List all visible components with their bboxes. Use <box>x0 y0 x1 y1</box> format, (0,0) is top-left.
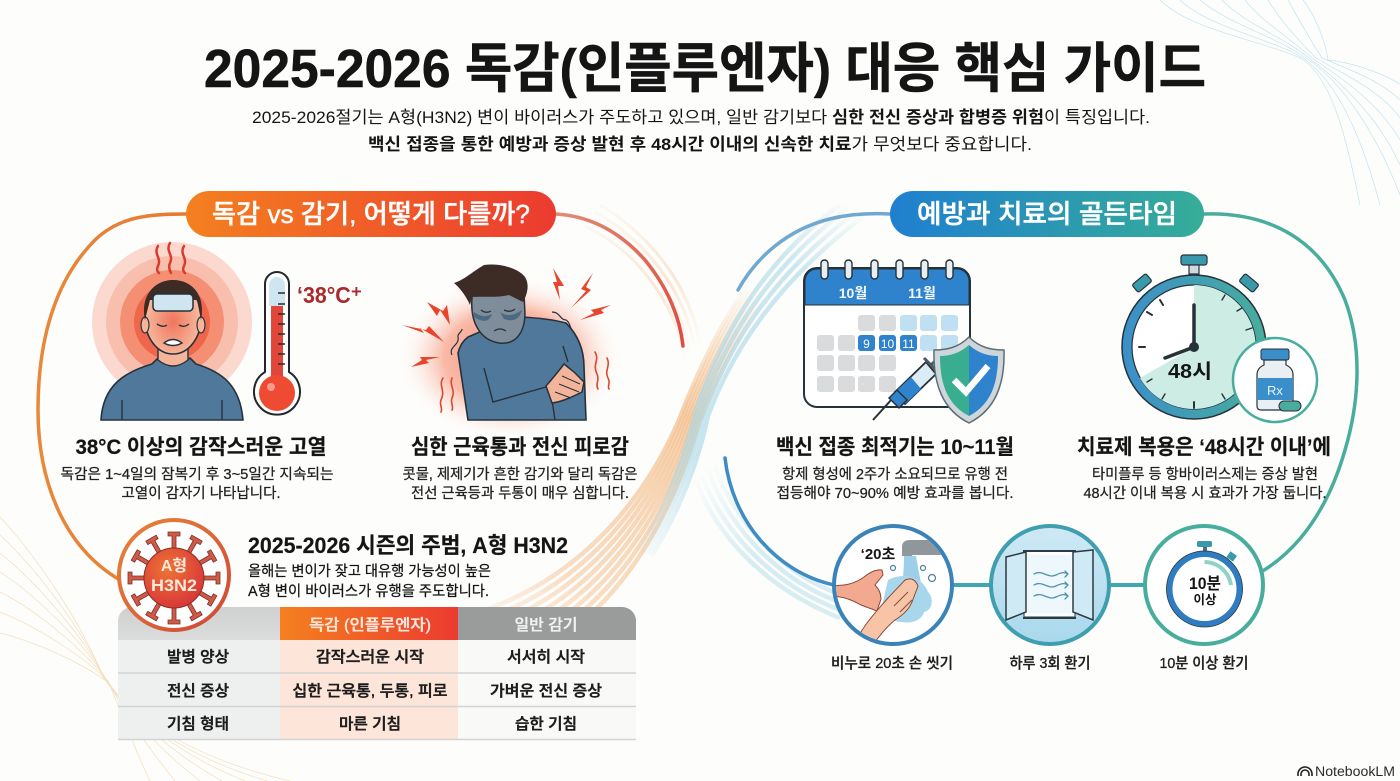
icon: stopwatch 48 hours: 48시 <box>1168 361 1212 383</box>
icon: calendar: 11 <box>902 337 915 351</box>
comparison table: 서서히 시작 <box>507 648 585 666</box>
comparison table: 마른 기침 <box>339 715 401 733</box>
block: severe muscle pain: 전선 근육등과 두통이 매우 심합니다. <box>411 485 629 502</box>
block: severe muscle pain <box>402 436 638 502</box>
comparison table: 십한 근육통, 두통, 피로 <box>292 682 448 700</box>
icon: stopwatch 48 hours <box>1122 255 1266 419</box>
icon: H3N2 virus badge: A형 <box>161 557 187 575</box>
panel: H3N2 text block: 2025-2026 시즌의 주범, A형 H3N2 <box>248 533 568 558</box>
subtitle text block: 백신 접종을 통한 예방과 증상 발현 후 48시간 이내의 신속한 치료 가 무엇보다 중요합니다. <box>368 135 1032 154</box>
label: hand washing: 비누로 20초 손 씻기 <box>831 655 953 672</box>
label: ventilate 3 times: 하루 3회 환기 <box>1010 655 1090 672</box>
icon: 10 minute timer: 이상 <box>1193 593 1217 607</box>
icon: H3N2 virus badge <box>119 520 229 630</box>
background wave lines: top right <box>1160 0 1400 205</box>
block: sudden high fever: 38°C 이상의 감작스러운 고열 <box>76 436 326 459</box>
block: treatment timing: 타미플루 등 항바이러스제는 증상 발현 <box>1092 466 1318 483</box>
panel: H3N2 text block: 올해는 변이가 잦고 대유행 가능성이 높은 <box>248 563 491 580</box>
comparison table <box>118 607 636 740</box>
icon: 10 minute timer <box>1145 526 1263 644</box>
background ribbon: central S-curve <box>470 205 864 664</box>
icon: 10 minute timer: 10분 <box>1189 574 1221 593</box>
icon: fever person <box>92 242 252 420</box>
block: treatment timing: 치료제 복용은 ‘48시간 이내’에 <box>1077 436 1331 459</box>
background wave lines: bottom left <box>0 517 290 781</box>
panel: H3N2 text block: A형 변이 바이러스가 유행을 주도합니다. <box>248 583 489 600</box>
icon: thermometer <box>254 272 300 415</box>
block: sudden high fever <box>60 436 334 502</box>
subtitle text block: 2025-2026절기는 A형(H3N2) 변이 바이러스가 주도하고 있으며, 일반 감기보다 심한 전신 증상과 합병증 위험 이 특징입니다. <box>252 108 1150 127</box>
icon: calendar: 10월 <box>839 285 867 301</box>
section header: golden time <box>890 191 1204 237</box>
icon: medicine bottle badge: Rx <box>1267 383 1283 398</box>
block: vaccine timing: 백신 접종 최적기는 10~11월 <box>776 436 1014 459</box>
label: ventilate 10 minutes: 10분 이상 환기 <box>1160 655 1248 672</box>
comparison table: 가벼운 전신 증상 <box>490 682 602 700</box>
block: treatment timing <box>1077 436 1331 502</box>
block: vaccine timing <box>776 436 1014 502</box>
section header: flu vs cold: 독감 vs 감기, 어떻게 다를까? <box>212 199 530 229</box>
comparison table: 습한 기침 <box>515 715 577 733</box>
icon: medicine bottle badge <box>1233 338 1317 422</box>
comparison table: 발병 양상 <box>167 648 229 666</box>
section header: golden time: 예방과 치료의 골든타임 <box>917 199 1177 229</box>
icon: person with muscle pain <box>400 265 620 438</box>
comparison table: 전신 증상 <box>167 682 229 700</box>
block: sudden high fever: 독감은 1~4일의 잠복기 후 3~5일간 지속되는 <box>60 466 334 483</box>
icon: H3N2 virus badge: H3N2 <box>151 577 197 595</box>
title: 2025-2026 독감(인플루엔자) 대응 핵심 가이드 <box>204 39 1206 99</box>
comparison table: 독감 (인플루엔자) <box>309 616 431 634</box>
block: severe muscle pain: 콧물, 제제기가 흔한 감기와 달리 독감은 <box>402 466 638 483</box>
watermark: NotebookLM: NotebookLM <box>1315 764 1395 779</box>
comparison table: 기침 형태 <box>167 715 229 733</box>
icon: calendar: 10 <box>881 337 894 351</box>
frame line: left panel <box>38 214 683 580</box>
icon: hand washing <box>830 526 952 652</box>
icon: calendar <box>804 260 970 407</box>
comparison table: 감작스러운 시작 <box>316 648 424 666</box>
connectors between circles <box>952 583 1145 587</box>
subtitle text block <box>252 108 1150 154</box>
label: 38°C+: ‘38°C⁺ <box>297 282 362 308</box>
icon: syringe <box>873 350 946 420</box>
icon: hand washing: ‘20초 <box>861 546 896 563</box>
icon: calendar: 9 <box>863 337 870 351</box>
section header: flu vs cold <box>186 191 556 237</box>
icon: calendar: 11월 <box>908 285 936 301</box>
comparison table: 일반 감기 <box>514 616 578 634</box>
panel: H3N2 text block <box>248 533 568 600</box>
block: vaccine timing: 항제 형성에 2주가 소요되므로 유행 전 <box>782 466 1008 483</box>
block: sudden high fever: 고열이 감자기 나타납니다. <box>122 485 280 502</box>
block: treatment timing: 48시간 이내 복용 시 효과가 가장 둡니다. <box>1084 485 1326 502</box>
frame line: right panel <box>725 214 1357 586</box>
block: vaccine timing: 접등해야 70~90% 예방 효과를 봅니다. <box>776 485 1014 502</box>
block: severe muscle pain: 심한 근육통과 전신 피로감 <box>411 436 629 459</box>
icon: shield with check <box>934 337 1004 423</box>
icon: open window <box>991 526 1109 644</box>
